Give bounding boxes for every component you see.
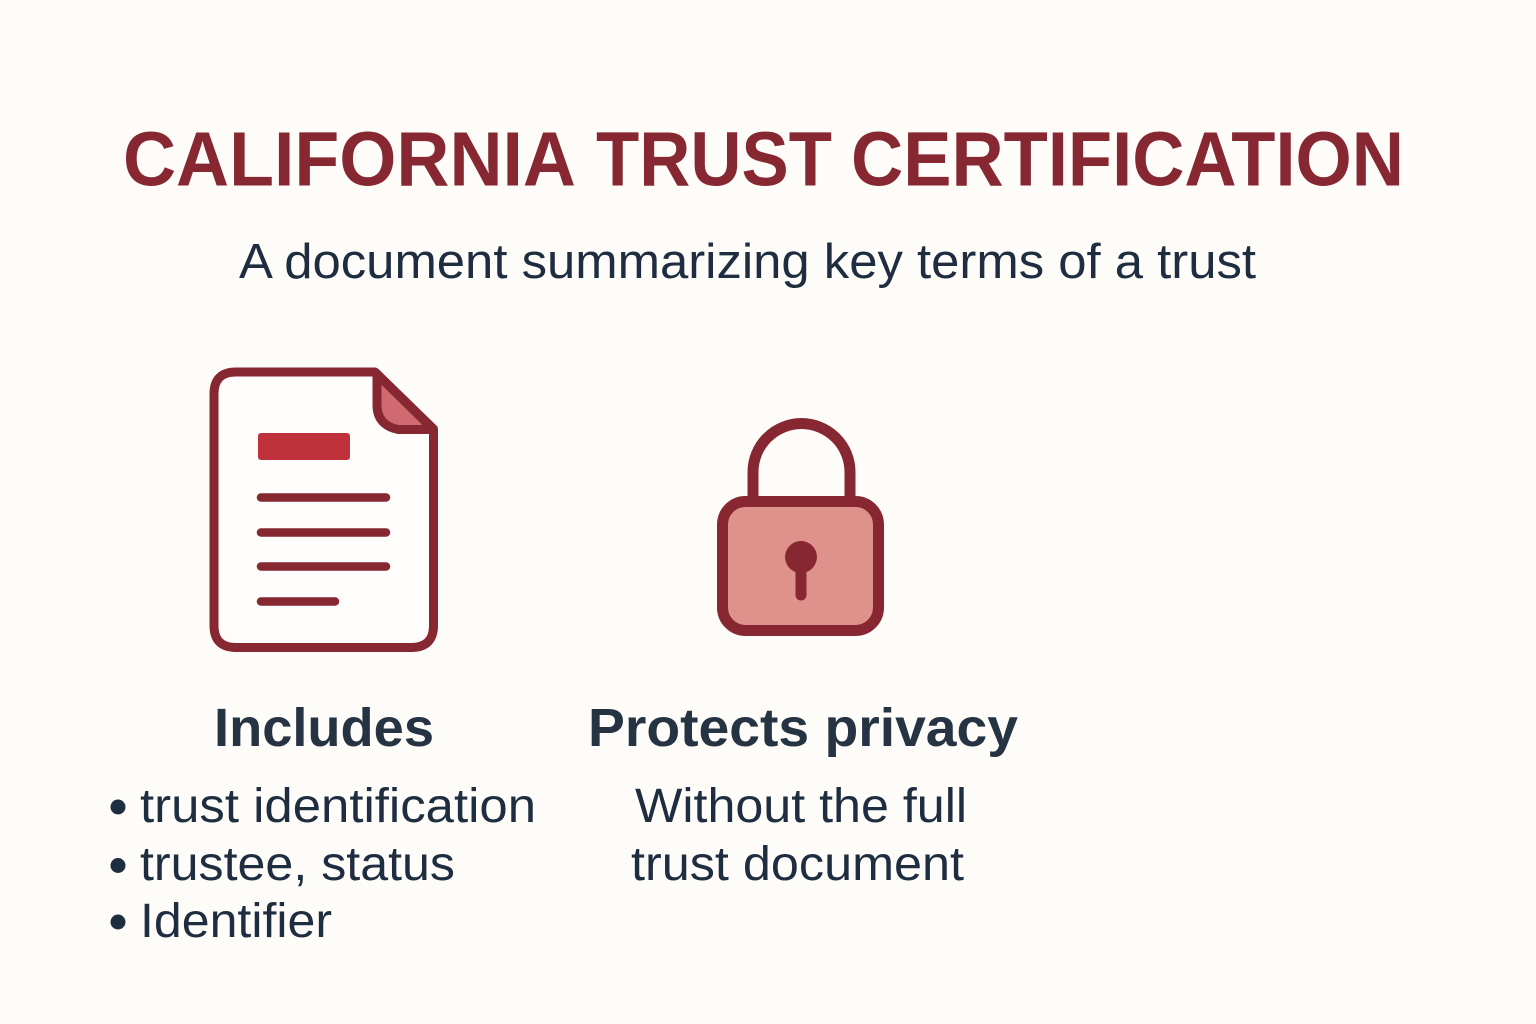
- heading: protects privacy: Protects privacy: [588, 698, 1018, 758]
- icon: padlock keyhole: [785, 541, 817, 600]
- title: TRUST: [596, 116, 832, 202]
- icon: padlock: [722, 424, 878, 630]
- title: CERTIFICATION: [851, 116, 1404, 202]
- icon: padlock body: [722, 502, 878, 630]
- icon: document fold: [377, 374, 434, 430]
- text: privacy description: trust document: [631, 838, 964, 891]
- subtitle: A document summarizing key terms of a trust: [239, 235, 1256, 289]
- title: CALIFORNIA: [123, 116, 576, 202]
- text: privacy description: Without the full: [635, 780, 967, 833]
- list: includes items: Identifier: [140, 895, 332, 948]
- icon: document: [214, 372, 434, 648]
- text: privacy description: [631, 780, 967, 891]
- icon: document heading bar: [258, 433, 350, 460]
- list: includes items: [110, 780, 536, 948]
- title: [123, 116, 1404, 202]
- icon: document text lines: [261, 498, 386, 602]
- heading: includes: Includes: [214, 698, 434, 758]
- list: includes items: trustee, status: [140, 838, 455, 891]
- list: includes items: trust identification: [140, 780, 536, 833]
- icon: padlock shackle: [753, 424, 850, 500]
